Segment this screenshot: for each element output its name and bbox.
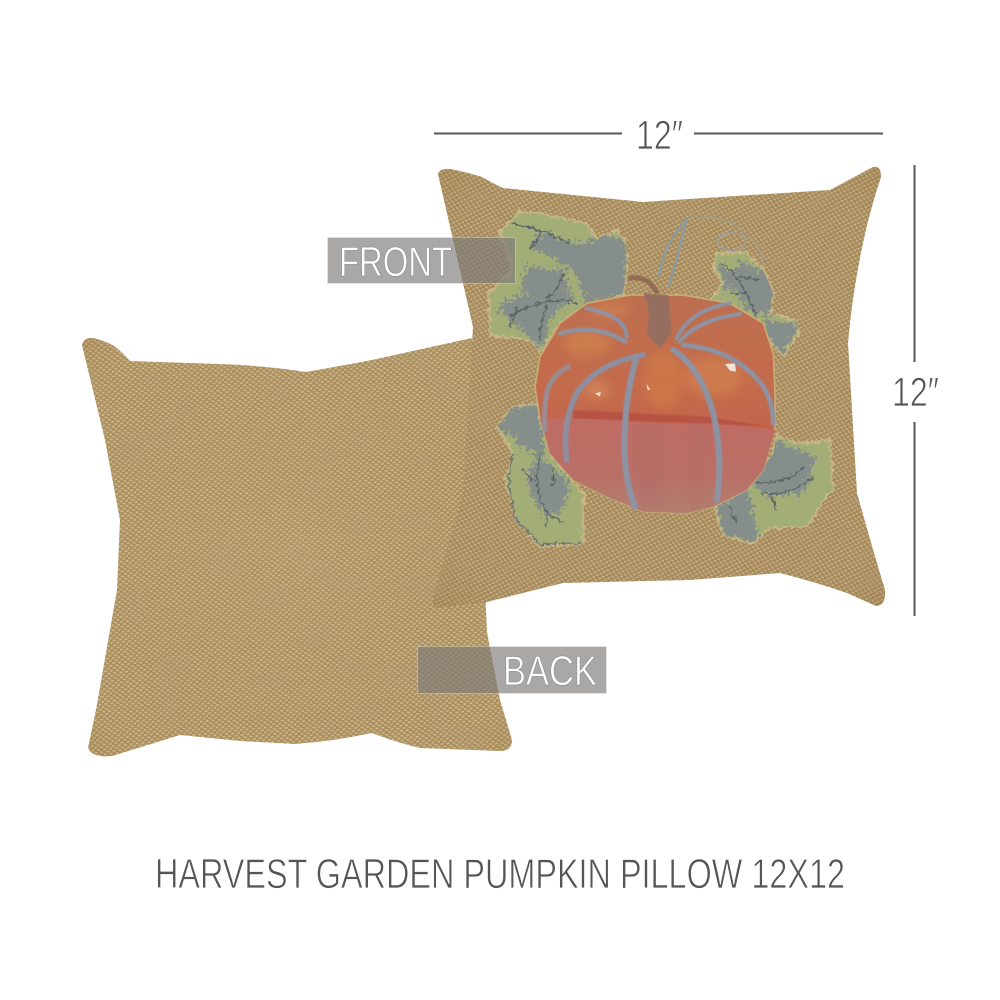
vine tendril <box>658 218 763 287</box>
pumpkin ribs and stem <box>544 278 773 507</box>
dimension: width 12 inches: 12″ <box>636 112 683 158</box>
label: front: FRONT <box>339 238 452 285</box>
pillow: back <box>70 330 520 765</box>
leaf: top left <box>488 212 627 352</box>
label: back: BACK <box>503 647 597 694</box>
leaf: bottom right <box>715 435 833 543</box>
pillow: front <box>425 160 895 615</box>
dimension: height 12 inches: 12″ <box>892 369 939 415</box>
leaf: bottom left <box>495 405 583 547</box>
leaf: top right <box>710 253 798 357</box>
label: back <box>418 646 606 694</box>
pumpkin artwork <box>488 212 833 547</box>
pumpkin body <box>535 295 775 513</box>
